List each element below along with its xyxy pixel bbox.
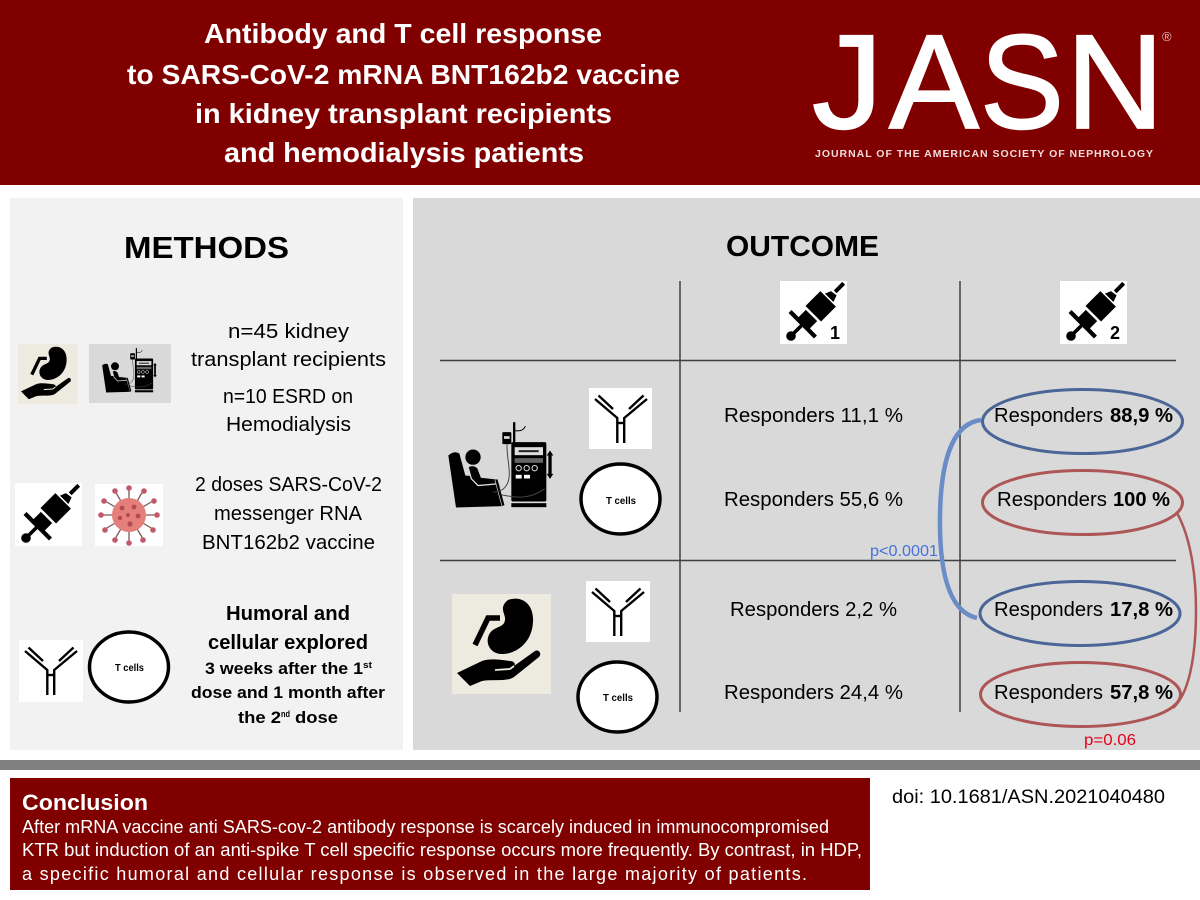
- label: p value antibody: p<0.0001: [870, 543, 938, 560]
- panel: methods: [10, 198, 403, 750]
- JASN logo: ®: [1162, 29, 1172, 44]
- icon: kidney transplant patients: [452, 594, 551, 694]
- text: study population: n=10 ESRD on: [223, 386, 353, 408]
- bracket: T cell comparison: [1173, 513, 1196, 708]
- dose 2 responder values: 57,8 %: [1110, 682, 1173, 704]
- icon: T cell: T cells: [115, 663, 144, 674]
- text: exploration timing: [191, 603, 385, 727]
- icon: dose 2: 2: [1110, 323, 1120, 343]
- dose 2 responder values: Responders: [994, 599, 1103, 621]
- text: vaccine: [195, 474, 382, 554]
- text: exploration timing: cellular explored: [208, 632, 368, 654]
- icon: T cells row 2: T cells: [606, 496, 636, 507]
- text: study population: n=45 kidney: [228, 321, 349, 343]
- text: study population: Hemodialysis: [226, 414, 351, 436]
- JASN logo: [812, 8, 1172, 160]
- text: conclusion body: KTR but induction of an anti-spike T cell specific response occurs more frequently. By contrast, in HDP,: [22, 840, 862, 860]
- icon: T cells row 4: [578, 662, 657, 732]
- heading: methods: METHODS: [124, 230, 289, 265]
- dose 2 responder values: 17,8 %: [1110, 599, 1173, 621]
- text: exploration timing: dose and 1 month after: [191, 683, 385, 702]
- title: to SARS-CoV-2 mRNA BNT162b2 vaccine: [127, 59, 680, 90]
- icon: T cells row 4: T cells: [603, 693, 633, 704]
- text: exploration timing: nd: [281, 709, 290, 719]
- title: Antibody and T cell response: [204, 18, 602, 49]
- header band: [0, 0, 1200, 185]
- dose 2 responder values: [994, 405, 1173, 704]
- dose 2 responder values: Responders: [994, 682, 1103, 704]
- text: vaccine: 2 doses SARS-CoV-2: [195, 474, 382, 496]
- title: in kidney transplant recipients: [195, 98, 612, 129]
- icon: dose 2: [1055, 271, 1136, 352]
- JASN logo: J: [812, 8, 883, 157]
- title: and hemodialysis patients: [224, 137, 584, 168]
- text: exploration timing: st: [363, 660, 372, 670]
- dose 1 responder values: Responders 2,2 %: [730, 599, 897, 621]
- text: exploration timing: the 2: [238, 708, 281, 727]
- text: study population: transplant recipients: [191, 349, 386, 371]
- icon: virus: [95, 484, 163, 546]
- text: study population: [191, 321, 386, 436]
- text: exploration timing: Humoral and: [226, 603, 350, 625]
- doi: doi: 10.1681/ASN.2021040480: [892, 787, 1165, 808]
- text: vaccine: BNT162b2 vaccine: [202, 532, 375, 554]
- JASN logo: N: [1066, 8, 1164, 157]
- dose 1 responder values: Responders 55,6 %: [724, 489, 903, 511]
- icon: dose 1: 1: [830, 323, 840, 343]
- ellipses: dose 2 highlights: [980, 390, 1182, 726]
- icon: antibody row 3: [586, 581, 650, 642]
- icon: antibody row 1: [589, 388, 652, 449]
- JASN logo: A: [889, 8, 980, 157]
- title: [127, 18, 680, 168]
- dose 1 responder values: Responders 24,4 %: [724, 682, 903, 704]
- bracket: antibody comparison: [940, 420, 981, 618]
- dose 2 responder values: Responders: [994, 405, 1103, 427]
- text: exploration timing: 3 weeks after the 1: [205, 659, 363, 678]
- label: p value T cell: p=0.06: [1084, 732, 1136, 749]
- text: conclusion body: a specific humoral and cellular response is observed in the large majority of patients.: [22, 864, 807, 884]
- dose 1 responder values: Responders 11,1 %: [724, 405, 903, 427]
- dose 1 responder values: [724, 405, 903, 704]
- JASN logo: S: [980, 8, 1064, 157]
- text: conclusion body: After mRNA vaccine anti SARS-cov-2 antibody response is scarcely induced in immunocompromised: [22, 817, 829, 837]
- text: exploration timing: dose: [295, 708, 338, 727]
- icon: antibody: [19, 640, 83, 702]
- heading: outcome: OUTCOME: [726, 231, 879, 263]
- icon: T cells row 2: [581, 464, 660, 534]
- dose 2 responder values: 100 %: [1113, 489, 1170, 511]
- table grid: [440, 281, 1176, 712]
- icon: syringe: [10, 473, 91, 554]
- panel: conclusion: [10, 778, 870, 890]
- icon: T cell: [90, 632, 168, 702]
- icon: kidney transplant: [18, 344, 77, 404]
- text: conclusion body: [22, 817, 862, 884]
- JASN logo: JOURNAL OF THE AMERICAN SOCIETY OF NEPHROLOGY: [815, 148, 1153, 160]
- dose 2 responder values: 88,9 %: [1110, 405, 1173, 427]
- text: vaccine: messenger RNA: [214, 503, 363, 525]
- icon: dialysis: [89, 344, 171, 403]
- panel: outcome: [413, 198, 1200, 750]
- divider bar: [0, 760, 1200, 770]
- icon: dialysis patients: [448, 422, 553, 508]
- dose 2 responder values: Responders: [997, 489, 1107, 511]
- icon: dose 1: [775, 271, 856, 352]
- heading: conclusion: Conclusion: [22, 790, 148, 815]
